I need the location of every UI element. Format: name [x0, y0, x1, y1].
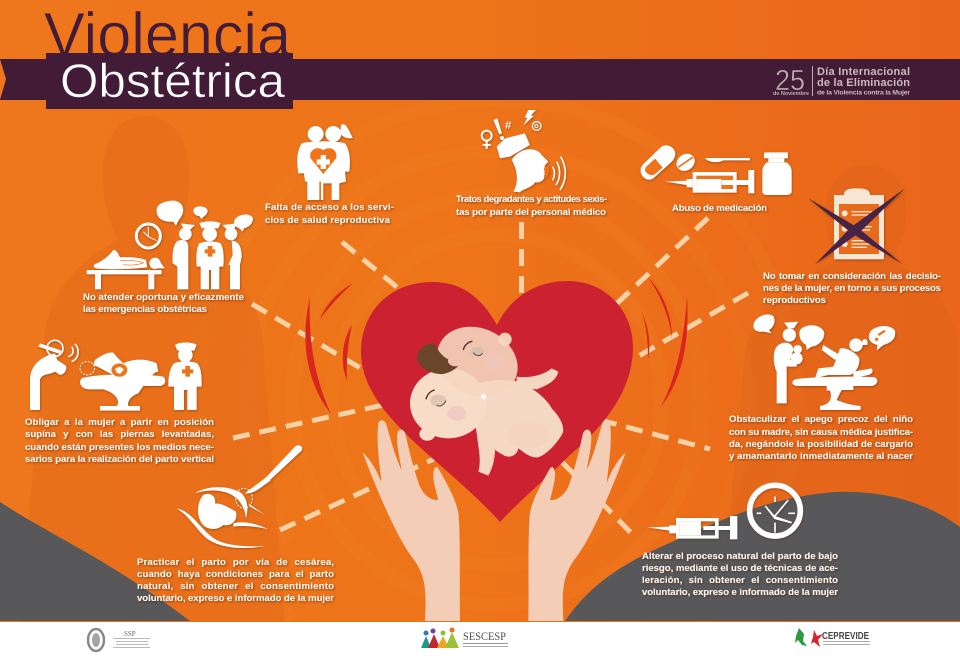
text: obstaculizar el apego: y amamantarlo inmediatamente al nacer [729, 451, 913, 462]
text: alterar el proceso: Alterar el proceso natural del parto de bajo [642, 551, 838, 562]
text: practicar el parto: Practicar el parto por vía de cesárea, [137, 557, 334, 568]
text: no tomar en consideración: nes de la mujer, en torno a sus procesos [763, 283, 941, 294]
heart [361, 281, 633, 522]
left hand [363, 420, 460, 621]
header band [0, 59, 960, 100]
text: no atender [83, 292, 244, 315]
logo: SSP [88, 629, 150, 651]
right hand [528, 420, 626, 621]
icon: patient ignored by medical staff [87, 201, 253, 289]
text: abuso de medicación: Abuso de medicación [672, 203, 767, 214]
logo: SESCESP: SESCESP [463, 631, 506, 643]
icon: cesarean scalpel [177, 445, 302, 548]
text: falta de acceso: cios de salud reproductiva [265, 215, 391, 226]
text: obstaculizar el apego: da, negándole la posibilidad de cargarlo [729, 439, 913, 450]
logo: SESCESP [421, 628, 508, 648]
date block: 25 de Noviembre: de Noviembre [773, 91, 809, 97]
hands [363, 420, 626, 621]
text: obligar a la mujer: Obligar a la mujer a parir en posición [25, 417, 214, 428]
text: falta de acceso: Falta de acceso a los servi- [265, 202, 394, 213]
text: falta de acceso [265, 202, 394, 226]
text: tratos degradantes [456, 194, 607, 218]
footer [0, 622, 960, 658]
icon: separation of baby and mother [753, 314, 895, 410]
icon: medication [641, 145, 792, 195]
text: obstaculizar el apego: Obstaculizar el apego precoz del niño [729, 414, 913, 425]
text: alterar el proceso [642, 551, 838, 598]
logo: CEPREVIDE: CEPREVIDE [822, 631, 869, 642]
date block: 25 de Noviembre: Día Internacional [817, 66, 910, 78]
icon: degraded treatment: # [505, 119, 512, 131]
text: alterar el proceso: leración, sin obtener el consentimiento [642, 575, 838, 586]
title: Violencia: Violencia [44, 1, 292, 70]
icon: degraded treatment [482, 110, 565, 192]
grey wave right [565, 492, 960, 621]
grey wave left [0, 502, 190, 621]
icon: clipboard crossed out [808, 188, 905, 264]
logo: CEPREVIDE [795, 628, 870, 647]
logo: SSP: SSP [124, 630, 136, 638]
text: alterar el proceso: riesgo, mediante el uso de técnicas de ace- [642, 563, 838, 574]
title box: Obstétrica: Obstétrica [60, 54, 286, 107]
date block: 25 de Noviembre: de la Eliminación [817, 77, 910, 89]
baby [410, 314, 563, 476]
text: no tomar en consideración: reproductivos [763, 295, 826, 306]
text: practicar el parto: voluntario, expreso e informado de la mujer [137, 593, 334, 604]
text: obligar a la mujer: sarios para la realización del parto vertical [25, 454, 214, 465]
date block: 25 de Noviembre [773, 65, 910, 97]
text: obligar a la mujer [25, 417, 214, 465]
red vibration arcs [305, 277, 688, 414]
text: obstaculizar el apego [729, 414, 913, 462]
text: tratos degradantes: tas por parte del personal médico [456, 207, 606, 218]
date block: 25 de Noviembre: de la Violencia contra la Mujer [817, 90, 910, 96]
text: practicar el parto: cuando haya condiciones para el parto [137, 569, 334, 580]
icon: forced supine position [30, 340, 202, 411]
text: no tomar en consideración: No tomar en consideración las decisio- [763, 271, 941, 282]
date block: 25 de Noviembre: 25 [775, 65, 805, 97]
text: no atender: No atender oportuna y eficazmente [83, 292, 244, 303]
text: tratos degradantes: Tratos degradantes y actitudes sexis- [456, 194, 607, 204]
text: practicar el parto: natural, sin obtener el consentimiento [137, 581, 334, 592]
text: no tomar en consideración [763, 271, 941, 306]
icon: couple with heart [297, 124, 353, 200]
icon: syringe and clock [647, 485, 800, 539]
text: alterar el proceso: voluntario, expreso e informado de la mujer [642, 587, 838, 598]
dashed rays [233, 218, 748, 536]
text: obligar a la mujer: supina y con las piernas levantadas, [25, 429, 214, 440]
text: obstaculizar el apego: con su madre, sin causa médica justifica- [729, 427, 913, 438]
text: obligar a la mujer: cuando están presentes los medios nece- [25, 442, 214, 453]
text: practicar el parto [137, 557, 334, 604]
text: no atender: las emergencias obstétricas [83, 304, 207, 315]
